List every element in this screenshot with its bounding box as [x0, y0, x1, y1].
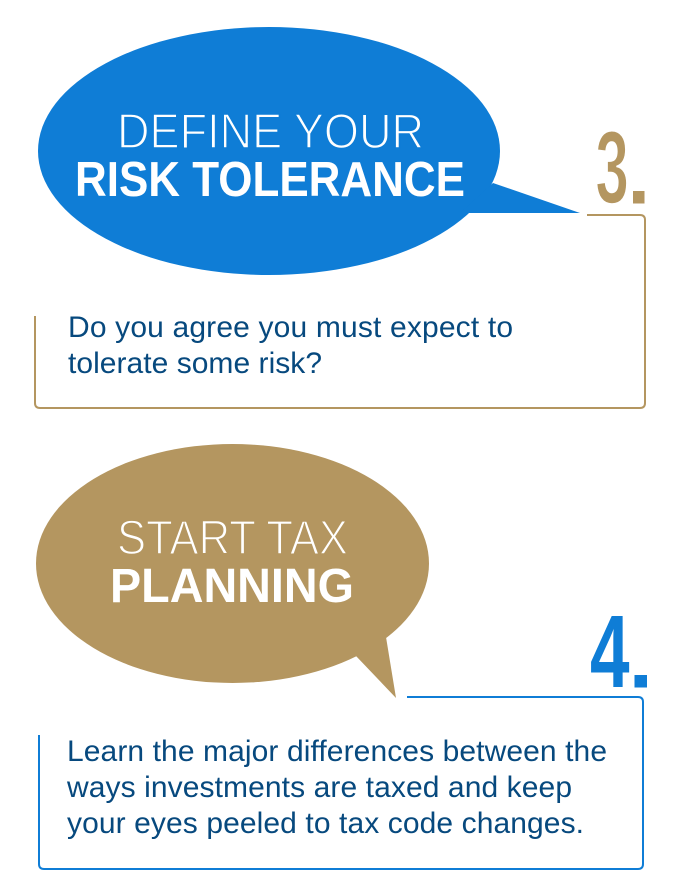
number dot: 3	[633, 191, 644, 204]
text box outline: step 3	[35, 215, 645, 408]
body text: step 4: Learn the major differences between the	[67, 735, 607, 768]
heading: define your risk tolerance: DEFINE YOUR	[117, 105, 424, 159]
heading: define your risk tolerance: RISK TOLERANCE	[75, 152, 465, 207]
heading: start tax planning: PLANNING	[110, 560, 354, 613]
heading: define your risk tolerance	[75, 105, 465, 207]
body text: step 4: ways investments are taxed and keep	[66, 771, 572, 804]
number: 3: 3	[596, 110, 629, 225]
speech bubble: blue	[38, 27, 580, 275]
speech bubble: gold	[36, 444, 429, 698]
text box outline: step 4	[39, 697, 643, 869]
number dot: 4	[634, 675, 647, 688]
body text: step 3: tolerate some risk?	[68, 347, 322, 380]
heading: start tax planning	[110, 512, 354, 613]
body text: step 3	[68, 311, 513, 380]
body text: step 3: Do you agree you must expect to	[68, 311, 513, 344]
body text: step 4: your eyes peeled to tax code changes.	[67, 807, 584, 840]
panel: step 4 start tax planning	[36, 444, 647, 869]
heading: start tax planning: START TAX	[117, 512, 348, 565]
number: 4: 4	[590, 594, 630, 709]
body text: step 4	[66, 735, 607, 840]
panel: step 3 define your risk tolerance	[35, 27, 645, 408]
